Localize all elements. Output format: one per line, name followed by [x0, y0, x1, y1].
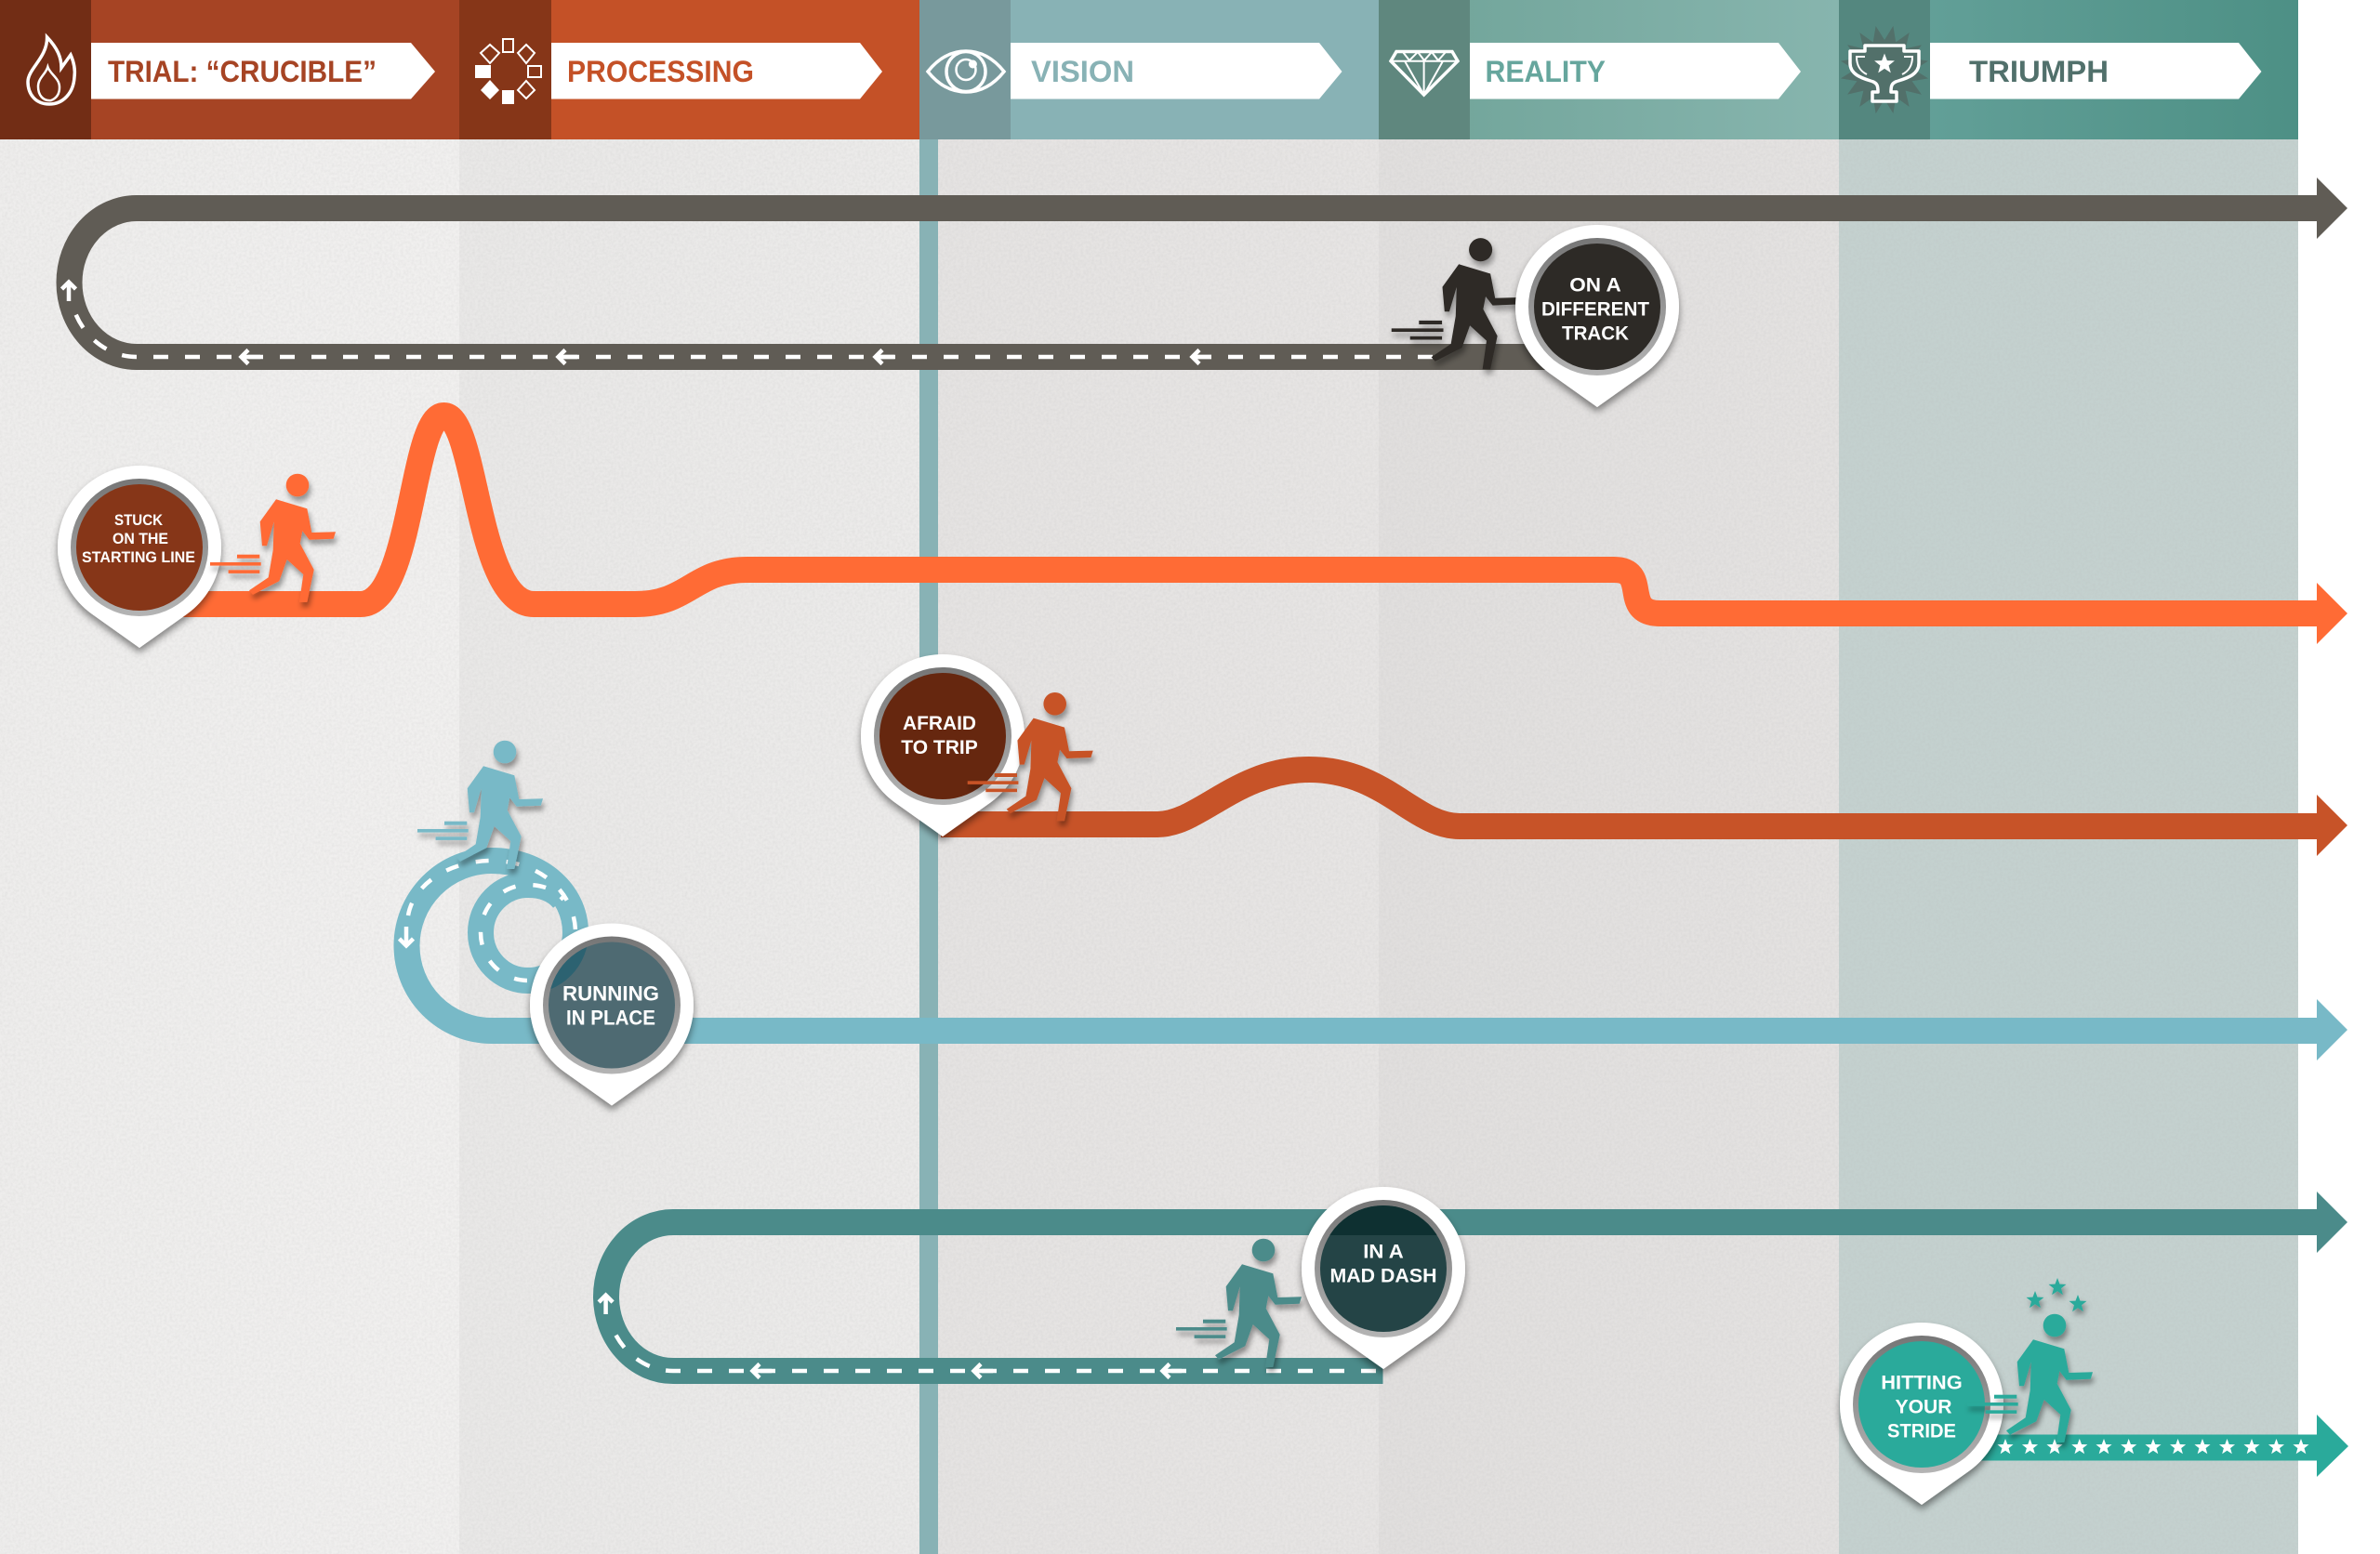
pin: stuck on the starting line: ON THE — [112, 530, 168, 547]
track: hitting your stride — [1966, 1415, 2348, 1477]
pin: afraid to trip — [861, 654, 1025, 836]
pin: in a mad dash: IN A — [1363, 1242, 1404, 1262]
pin: hitting your stride: YOUR — [1895, 1396, 1952, 1418]
runner: dark — [1392, 238, 1519, 369]
track: afraid to trip — [941, 770, 2347, 856]
header: reality — [1379, 0, 1839, 139]
track: on a different track — [61, 178, 2347, 364]
header: vision: VISION — [1031, 55, 1134, 88]
stars on track — [1972, 1439, 2309, 1454]
pin: in a mad dash — [1302, 1187, 1465, 1369]
header: processing: PROCESSING — [567, 55, 754, 88]
icon: diamond — [1391, 52, 1458, 95]
header: trial: TRIAL: “CRUCIBLE” — [108, 55, 377, 88]
runner: orange — [210, 474, 336, 602]
icon: trophy with burst — [1832, 18, 1937, 122]
pin: stuck on the starting line: STUCK — [114, 511, 164, 529]
pin: stuck on the starting line — [58, 466, 221, 648]
pin: stuck on the starting line: STARTING LINE — [82, 548, 195, 566]
header: trial — [0, 0, 459, 139]
pin: hitting your stride: HITTING — [1881, 1372, 1963, 1394]
pin: running in place — [528, 923, 694, 1106]
pin: running in place: RUNNING — [562, 981, 659, 1006]
pin: on a different track: DIFFERENT — [1541, 299, 1649, 320]
pin: in a mad dash: MAD DASH — [1329, 1266, 1437, 1286]
vision vertical marker line — [919, 139, 938, 1554]
pin: on a different track: ON A — [1569, 275, 1621, 296]
track: running in place — [400, 861, 2347, 1060]
pin: afraid to trip: TO TRIP — [901, 737, 978, 758]
icon: flame — [28, 37, 74, 104]
track: stuck on the starting line — [139, 415, 2347, 644]
icon: processing loader — [475, 39, 541, 104]
icon: eye — [928, 51, 1004, 92]
runner: light teal — [417, 741, 543, 869]
runner: bright teal with stars — [1967, 1278, 2093, 1442]
pin: on a different track — [1515, 225, 1679, 407]
header: vision — [919, 0, 1379, 139]
pin: hitting your stride — [1840, 1323, 2003, 1505]
header: triumph: TRIUMPH — [1969, 55, 2109, 88]
header band — [0, 0, 2298, 139]
pin: on a different track: TRACK — [1562, 323, 1629, 344]
pin: hitting your stride: STRIDE — [1887, 1420, 1956, 1442]
pin: running in place: IN PLACE — [566, 1006, 655, 1030]
header: processing — [459, 0, 919, 139]
header: triumph — [1832, 0, 2298, 139]
header: reality: REALITY — [1486, 55, 1606, 88]
pin: afraid to trip: AFRAID — [903, 713, 976, 734]
track: in a mad dash — [599, 1192, 2347, 1377]
runner: burnt orange — [968, 692, 1093, 821]
runner: dark teal — [1176, 1239, 1302, 1367]
